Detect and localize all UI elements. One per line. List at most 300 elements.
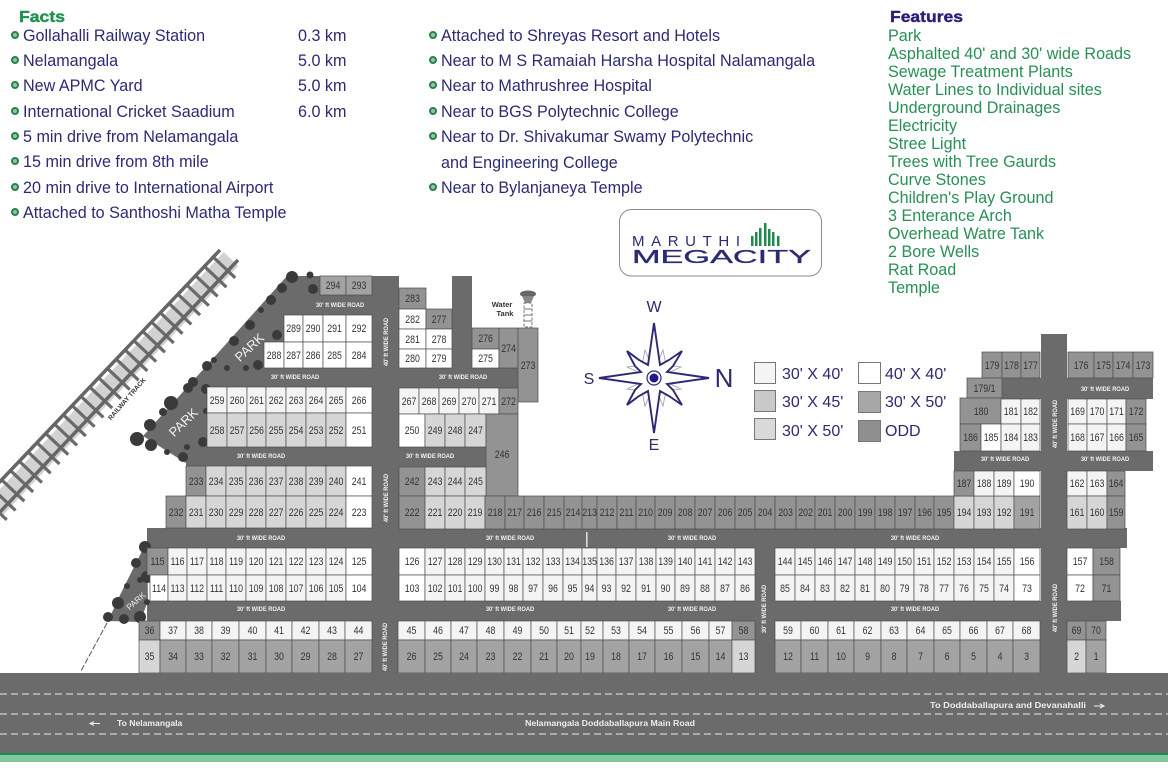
plots: north-west block: 227 — [269, 507, 284, 519]
plots: row 114 to 71: 85 — [780, 583, 790, 595]
plots: row 114 to 71: 84 — [800, 583, 810, 595]
plots: north-centre block: 272 — [501, 396, 516, 408]
plots: row 115 to 158: 148 — [858, 556, 873, 568]
plots: north-east block: 187 — [957, 478, 972, 490]
plots: row 35 to 1: 22 — [513, 651, 523, 663]
plots: row 114 to 71: 113 — [171, 583, 185, 595]
plots: north-west block: 261 — [249, 395, 264, 407]
features list: Children's Play Ground — [888, 189, 1053, 207]
plots: north-centre block: 246 — [495, 449, 510, 461]
plots: north-east block: 177 — [1023, 360, 1038, 372]
plots: row 115 to 158: 147 — [838, 556, 853, 568]
plots: row 114 to 71: 103 — [405, 583, 420, 595]
plots: north-west block: 266 — [352, 395, 367, 407]
road labels: 30' ft WIDE ROAD — [891, 606, 940, 613]
plots: long row 222 to 191: 212 — [600, 507, 615, 519]
compass rose: S — [584, 371, 594, 388]
plots: north-east block: 169 — [1070, 406, 1085, 418]
facts list: Gollahalli Railway Station — [23, 27, 205, 45]
facts list: 5.0 km — [298, 52, 346, 70]
plots: row 35 to 1: 35 — [145, 651, 155, 663]
plots: long row 222 to 191: 194 — [957, 507, 972, 519]
plots: north-centre block: 250 — [405, 425, 420, 437]
facts list — [12, 27, 346, 222]
plots: row 35 to 1: 1 — [1094, 651, 1099, 663]
plots: north-west block: 290 — [306, 323, 321, 335]
plots: north-west block: 289 — [286, 323, 301, 335]
plots: north-west block: 259 — [210, 395, 225, 407]
plots: row 35 to 1: 26 — [407, 651, 417, 663]
legend: 30' X 45' — [782, 394, 843, 411]
plots: row 36 to 70: 48 — [486, 625, 496, 637]
plots: row 115 to 158: 151 — [917, 556, 932, 568]
plots: row 114 to 71: 110 — [229, 583, 243, 595]
plots: north-east block: 172 — [1129, 406, 1144, 418]
trees along parks — [103, 271, 318, 624]
green footer band — [0, 753, 1168, 762]
plots: long row 222 to 191: 213 — [582, 507, 597, 519]
park labels: PARK — [232, 330, 267, 365]
plots: north-west block: 285 — [327, 350, 342, 362]
plots: row 115 to 158: 121 — [269, 556, 284, 568]
plots: long row 222 to 191: 221 — [428, 507, 443, 519]
plots: row 35 to 1: 19 — [585, 651, 595, 663]
plots: row 36 to 70: 63 — [889, 625, 899, 637]
plots: row 35 to 1 — [139, 640, 1106, 673]
plots: long row 222 to 191: 191 — [1020, 507, 1035, 519]
plots: row 36 to 70: 49 — [513, 625, 523, 637]
plots: row 36 to 70: 44 — [354, 625, 364, 637]
plots: row 114 to 71: 72 — [1075, 583, 1085, 595]
plots: row 36 to 70: 66 — [969, 625, 979, 637]
plots: row 36 to 70: 43 — [327, 625, 337, 637]
main road — [0, 673, 1168, 753]
legend: 40' X 40' — [885, 366, 946, 383]
facts list: 20 min drive to International Airport — [23, 179, 274, 197]
plots: row 35 to 1: 34 — [168, 651, 178, 663]
compass rose — [584, 299, 733, 454]
plots: row 35 to 1: 12 — [783, 651, 793, 663]
plots: north-east block — [954, 352, 1153, 529]
plots: north-east block: 179/1 — [974, 383, 996, 395]
plots: north-centre block: 283 — [405, 293, 420, 305]
road labels: 30' ft WIDE ROAD — [237, 606, 286, 613]
plots: north-west block: 287 — [286, 350, 301, 362]
plots: row 114 to 71: 94 — [585, 583, 595, 595]
plots: row 115 to 158: 116 — [171, 556, 185, 568]
road labels: 30' ft WIDE ROAD — [1081, 386, 1130, 393]
legend — [754, 362, 946, 442]
road label: to Nelamangala: To Nelamangala — [117, 718, 182, 728]
features list: Overhead Watre Tank — [888, 225, 1045, 243]
road labels: 30' ft WIDE ROAD — [271, 374, 320, 381]
plots: north-east block: 160 — [1090, 507, 1105, 519]
plots: row 115 to 158 — [147, 548, 1120, 575]
plots: row 115 to 158: 146 — [818, 556, 833, 568]
road labels: 30' ft WIDE ROAD — [486, 535, 535, 542]
plots: north-west block: 256 — [249, 425, 264, 437]
plots: row 35 to 1: 7 — [918, 651, 923, 663]
plots: row 36 to 70: 67 — [995, 625, 1005, 637]
plots: north-east block: 181 — [1004, 406, 1019, 418]
road label: to Doddaballapura: To Doddaballapura and Devanahalli — [930, 700, 1086, 710]
plots: north-west block: 231 — [189, 507, 204, 519]
panel: nearby landmarks: Near to Mathrushree Hospital — [441, 77, 652, 95]
plots: row 35 to 1: 28 — [327, 651, 337, 663]
plots: north-west block: 265 — [329, 395, 344, 407]
plots: north-west block: 225 — [309, 507, 324, 519]
plots: row 114 to 71: 97 — [528, 583, 538, 595]
plots: long row 222 to 191: 197 — [898, 507, 913, 519]
road labels: 30' ft WIDE ROAD — [761, 584, 768, 633]
plots: north-east block: 163 — [1090, 478, 1105, 490]
plots: north-west block: 236 — [249, 476, 264, 488]
features list: Electricity — [888, 117, 958, 135]
plots: north-west block: 286 — [306, 350, 321, 362]
plots: row 35 to 1: 16 — [664, 651, 674, 663]
panel: facts — [12, 9, 346, 222]
plots: row 115 to 158: 135 — [582, 556, 597, 568]
plots: row 35 to 1: 2 — [1074, 651, 1079, 663]
plots: long row 222 to 191: 215 — [547, 507, 562, 519]
plots: row 36 to 70: 45 — [407, 625, 417, 637]
plots: row 36 to 70: 41 — [274, 625, 284, 637]
panel: nearby landmarks: and Engineering College — [441, 154, 618, 172]
plots: north-west block: 291 — [327, 323, 342, 335]
plots: north-west block: 223 — [352, 507, 367, 519]
plots: north-west block: 229 — [229, 507, 244, 519]
plots: row 114 to 71: 109 — [249, 583, 264, 595]
plots: row 114 to 71: 100 — [468, 583, 483, 595]
plots: north-centre block: 274 — [501, 343, 516, 355]
plots: long row 222 to 191: 217 — [507, 507, 522, 519]
legend: 30' X 50' — [782, 423, 843, 440]
plots: row 35 to 1: 33 — [194, 651, 204, 663]
compass rose: W — [646, 299, 662, 316]
facts list: International Cricket Saadium — [23, 103, 235, 121]
plots: row 114 to 71: 86 — [740, 583, 750, 595]
plots: north-centre block: 245 — [468, 476, 483, 488]
plots: row 114 to 71: 99 — [490, 583, 500, 595]
plots: north-west block: 237 — [269, 476, 284, 488]
panel: nearby landmarks: Attached to Shreyas Resort and Hotels — [441, 27, 720, 45]
plots: row 36 to 70: 42 — [301, 625, 311, 637]
plots: row 36 to 70: 58 — [739, 625, 749, 637]
plots: row 114 to 71: 96 — [548, 583, 558, 595]
plots: north-centre block: 270 — [462, 396, 477, 408]
plots: row 114 to 71: 83 — [820, 583, 830, 595]
plots: row 114 to 71: 112 — [190, 583, 204, 595]
plots: row 36 to 70: 61 — [836, 625, 846, 637]
plots: row 35 to 1: 13 — [739, 651, 749, 663]
plots: row 36 to 70: 68 — [1022, 625, 1032, 637]
plots: north-centre block: 273 — [521, 360, 536, 372]
arrow: right — [1094, 704, 1104, 708]
plots: north-west block: 234 — [209, 476, 224, 488]
plots: row 114 to 71: 78 — [919, 583, 929, 595]
plots: row 115 to 158: 141 — [698, 556, 713, 568]
plots: row 114 to 71: 104 — [352, 583, 367, 595]
plots: row 115 to 158: 157 — [1073, 556, 1088, 568]
plots: north-centre block — [399, 288, 538, 496]
plots: row 115 to 158: 125 — [352, 556, 367, 568]
plots: row 114 to 71: 95 — [568, 583, 578, 595]
plots: row 35 to 1: 30 — [274, 651, 284, 663]
water tank: Tank — [497, 309, 514, 318]
plots: row 36 to 70: 59 — [783, 625, 793, 637]
features list: 3 Enterance Arch — [888, 207, 1012, 225]
plots: north-centre block: 249 — [428, 425, 443, 437]
road labels: 30' ft WIDE ROAD — [668, 535, 717, 542]
plots: row 36 to 70: 47 — [459, 625, 469, 637]
facts list: 6.0 km — [298, 103, 346, 121]
plots: row 36 to 70: 40 — [248, 625, 258, 637]
road labels: 40' ft WIDE ROAD — [383, 473, 390, 522]
facts list: 5.0 km — [298, 77, 346, 95]
plots: north-west block: 284 — [352, 350, 367, 362]
plots: north-west block: 264 — [309, 395, 324, 407]
plots: row 36 to 70: 56 — [691, 625, 701, 637]
plots: north-east block: 173 — [1136, 360, 1151, 372]
plots: row 36 to 70: 69 — [1072, 625, 1082, 637]
plots: long row 222 to 191 — [399, 496, 1040, 529]
plots: long row 222 to 191: 208 — [678, 507, 693, 519]
plots: row 36 to 70 — [139, 621, 1106, 640]
heading: facts: Facts — [19, 9, 65, 26]
plots: row 115 to 158: 128 — [448, 556, 463, 568]
plots: north-west block: 292 — [352, 323, 367, 335]
plots: row 35 to 1: 4 — [998, 651, 1003, 663]
plots: row 35 to 1: 27 — [354, 651, 364, 663]
plots: row 114 to 71 — [150, 575, 1120, 601]
plots: row 114 to 71: 75 — [979, 583, 989, 595]
plots: long row 222 to 191: 222 — [405, 507, 420, 519]
plots: north-east block: 183 — [1023, 432, 1038, 444]
plots: north-centre block: 279 — [432, 353, 447, 365]
road labels: 30' ft WIDE ROAD — [486, 606, 535, 613]
road labels: 40' ft WIDE ROAD — [1052, 399, 1059, 448]
plots: north-west block: 235 — [229, 476, 244, 488]
plots: north-centre block: 282 — [405, 314, 420, 326]
plots: row 114 to 71: 92 — [621, 583, 631, 595]
plots: row 115 to 158: 158 — [1099, 556, 1114, 568]
plots: north-west block: 251 — [352, 425, 367, 437]
plots: row 115 to 158: 133 — [546, 556, 561, 568]
road labels: 30' ft WIDE ROAD — [439, 374, 488, 381]
panel: nearby landmarks: Near to M S Ramaiah Harsha Hospital Nalamangala — [441, 52, 815, 70]
plots: north-east block: 174 — [1116, 360, 1131, 372]
plots: long row 222 to 191: 203 — [778, 507, 793, 519]
plots: north-east block: 167 — [1090, 432, 1105, 444]
plots: north-centre block: 248 — [448, 425, 463, 437]
label: railway track: RAILWAY TRACK — [107, 377, 148, 422]
plots: row 114 to 71: 71 — [1102, 583, 1112, 595]
logo: Maruthi Megacity: MARUTHI — [632, 233, 740, 250]
features list: Asphalted 40' and 30' wide Roads — [888, 45, 1131, 63]
compass rose: E — [649, 437, 659, 454]
plots: row 36 to 70: 70 — [1091, 625, 1101, 637]
plots: north-east block: 184 — [1004, 432, 1019, 444]
plots: north-east block: 175 — [1096, 360, 1111, 372]
plots: row 115 to 158: 127 — [428, 556, 443, 568]
plots: row 115 to 158: 144 — [778, 556, 793, 568]
plots: row 114 to 71: 91 — [641, 583, 651, 595]
heading: features: Features — [890, 9, 963, 26]
panel: nearby landmarks: Near to Dr. Shivakumar Swamy Polytechnic — [441, 128, 753, 146]
plots: north-east block: 180 — [974, 406, 989, 418]
plots: row 36 to 70: 37 — [168, 625, 178, 637]
plots: row 115 to 158: 149 — [878, 556, 893, 568]
features list — [888, 27, 1131, 297]
plots: row 36 to 70: 65 — [942, 625, 952, 637]
plots: row 35 to 1: 18 — [611, 651, 621, 663]
plots: long row 222 to 191: 201 — [818, 507, 833, 519]
plots: row 36 to 70: 52 — [585, 625, 595, 637]
plots: long row 222 to 191: 210 — [638, 507, 653, 519]
plots: north-west block: 230 — [209, 507, 224, 519]
plots: north-east block: 186 — [963, 432, 978, 444]
features list: Rat Road — [888, 261, 956, 279]
plots: north-centre block: 244 — [448, 476, 463, 488]
plots: row 35 to 1: 32 — [221, 651, 231, 663]
plots: long row 222 to 191: 192 — [997, 507, 1012, 519]
plots: row 115 to 158: 123 — [309, 556, 324, 568]
plots: row 115 to 158: 156 — [1020, 556, 1035, 568]
plots: row 114 to 71: 114 — [152, 583, 166, 595]
plots: row 35 to 1: 25 — [433, 651, 443, 663]
plots: row 115 to 158: 143 — [738, 556, 753, 568]
plots: row 114 to 71: 101 — [448, 583, 463, 595]
water tank — [492, 290, 536, 327]
plots: north-east block: 170 — [1090, 406, 1105, 418]
plots: long row 222 to 191: 202 — [798, 507, 813, 519]
plots: north-centre block: 278 — [432, 334, 447, 346]
plots: row 114 to 71: 98 — [509, 583, 519, 595]
road labels: 30' ft WIDE ROAD — [981, 456, 1030, 463]
plots: row 36 to 70: 64 — [916, 625, 926, 637]
plots: north-centre block: 269 — [442, 396, 457, 408]
plots: north-west block: 226 — [289, 507, 304, 519]
plots: long row 222 to 191: 193 — [977, 507, 992, 519]
road labels: 30' ft WIDE ROAD — [237, 453, 286, 460]
plots: row 114 to 71: 79 — [900, 583, 910, 595]
plots: row 114 to 71: 102 — [428, 583, 443, 595]
plots: north-west block: 232 — [169, 507, 184, 519]
plots: north-east block: 165 — [1129, 432, 1144, 444]
road label: main road: Nelamangala Doddaballapura Main Road — [525, 718, 695, 728]
plots: row 35 to 1: 23 — [486, 651, 496, 663]
plots: row 115 to 158: 117 — [190, 556, 204, 568]
label: water tank: Water — [492, 300, 512, 309]
facts list: 5 min drive from Nelamangala — [23, 128, 238, 146]
plots: north-west block: 253 — [309, 425, 324, 437]
features list: Park — [888, 27, 922, 45]
logo: Maruthi Megacity — [620, 210, 822, 276]
plots: long row 222 to 191: 195 — [937, 507, 952, 519]
plots: row 36 to 70: 54 — [637, 625, 647, 637]
site road network — [81, 276, 1168, 673]
plots: north-centre block: 275 — [478, 353, 493, 365]
plots: north-east block: 171 — [1109, 406, 1124, 418]
plots: north-centre block: 242 — [405, 476, 420, 488]
plots: row 36 to 70: 38 — [194, 625, 204, 637]
plots: row 115 to 158: 124 — [329, 556, 344, 568]
plots: north-east block: 168 — [1070, 432, 1085, 444]
plots: row 115 to 158: 134 — [565, 556, 580, 568]
plots: row 115 to 158: 142 — [718, 556, 733, 568]
plots: north-east block: 190 — [1020, 478, 1035, 490]
plots: long row 222 to 191: 207 — [698, 507, 713, 519]
plots: north-west block: 260 — [230, 395, 245, 407]
facts list: 15 min drive from 8th mile — [23, 153, 209, 171]
plots: north-east block: 166 — [1109, 432, 1124, 444]
plots: row 36 to 70: 57 — [716, 625, 726, 637]
plots: row 35 to 1: 3 — [1024, 651, 1029, 663]
plots: row 114 to 71: 89 — [680, 583, 690, 595]
plots: row 115 to 158: 118 — [210, 556, 224, 568]
plots: row 114 to 71: 76 — [959, 583, 969, 595]
plots: row 115 to 158: 139 — [658, 556, 673, 568]
plots: row 35 to 1: 8 — [892, 651, 897, 663]
plots: north-west block: 288 — [267, 350, 282, 362]
plots: north-centre block: 277 — [432, 314, 447, 326]
plots: row 115 to 158: 122 — [289, 556, 304, 568]
road labels: 30' ft WIDE ROAD — [668, 606, 717, 613]
plots: north-west block: 238 — [289, 476, 304, 488]
plots: north-west block: 263 — [289, 395, 304, 407]
plots: north-west block — [166, 276, 372, 528]
plots: row 114 to 71: 107 — [289, 583, 304, 595]
plots: north-east block: 176 — [1074, 360, 1089, 372]
plots: row 36 to 70: 39 — [221, 625, 231, 637]
plots: north-east block: 162 — [1070, 478, 1085, 490]
plots: row 36 to 70: 51 — [564, 625, 574, 637]
road labels: 30' ft WIDE ROAD — [1081, 456, 1130, 463]
panel: nearby landmarks: Near to Bylanjaneya Temple — [441, 179, 643, 197]
plots: long row 222 to 191: 204 — [758, 507, 773, 519]
plots: row 35 to 1: 29 — [301, 651, 311, 663]
plots: long row 222 to 191: 218 — [488, 507, 503, 519]
plots: long row 222 to 191: 214 — [566, 507, 581, 519]
plots: north-east block: 161 — [1070, 507, 1085, 519]
plots: north-east block: 189 — [997, 478, 1012, 490]
plots: row 35 to 1: 5 — [971, 651, 976, 663]
plots: row 115 to 158: 153 — [957, 556, 972, 568]
plots: north-centre block: 243 — [428, 476, 443, 488]
features list: Stree Light — [888, 135, 967, 153]
railway track — [0, 250, 238, 512]
road labels: 30' ft WIDE ROAD — [237, 535, 286, 542]
plots: row 36 to 70: 53 — [611, 625, 621, 637]
plots: north-east block: 159 — [1109, 507, 1124, 519]
plots: long row 222 to 191: 206 — [718, 507, 733, 519]
plots: row 35 to 1: 14 — [716, 651, 726, 663]
plots: north-west block: 224 — [329, 507, 344, 519]
plots: row 114 to 71: 105 — [329, 583, 344, 595]
plots: north-west block: 258 — [210, 425, 225, 437]
plots: long row 222 to 191: 196 — [917, 507, 932, 519]
plots: north-east block: 164 — [1109, 478, 1124, 490]
plots: long row 222 to 191: 200 — [838, 507, 853, 519]
plots: row 114 to 71: 81 — [860, 583, 870, 595]
panel: features — [888, 9, 1131, 297]
plots: long row 222 to 191: 209 — [658, 507, 673, 519]
plots: row 115 to 158: 131 — [506, 556, 521, 568]
plots: row 36 to 70: 60 — [810, 625, 820, 637]
plots: long row 222 to 191: 219 — [468, 507, 483, 519]
facts list: New APMC Yard — [23, 77, 143, 95]
road labels: 30' ft WIDE ROAD — [406, 453, 455, 460]
